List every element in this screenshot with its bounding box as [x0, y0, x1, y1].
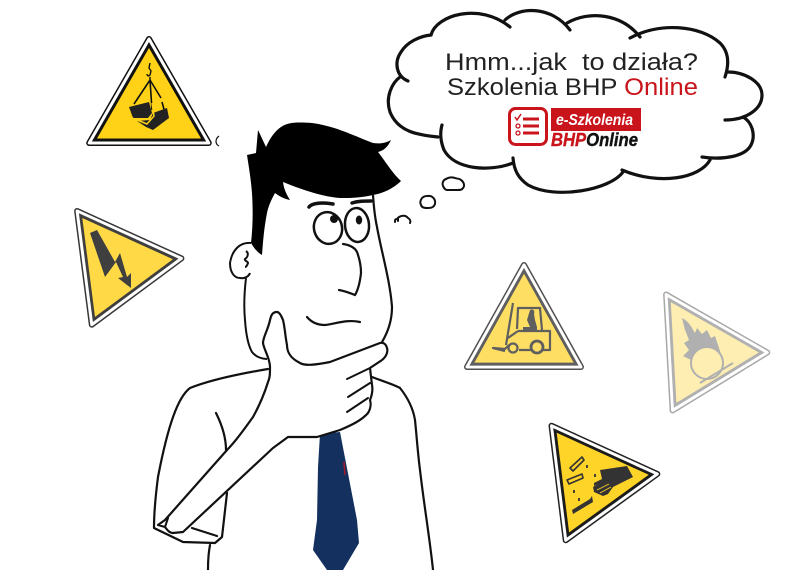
logo: e-Szkolenia BHPOnline	[510, 108, 641, 150]
thought cloud heading: Hmm...jak to działa?	[445, 49, 698, 76]
tie	[313, 432, 359, 570]
warning sign: oxidising material (faded)	[666, 294, 767, 410]
logo banner	[551, 108, 641, 131]
eyes	[310, 207, 370, 247]
small stray mark beside first sign	[216, 136, 219, 146]
warning sign: falling suspended load	[89, 39, 209, 143]
mouth	[307, 317, 360, 325]
thought cloud heading	[445, 49, 698, 101]
hand fingers	[165, 368, 370, 527]
ear	[230, 243, 251, 278]
thought cloud heading: Szkolenia BHP Online	[447, 74, 698, 101]
thought cloud	[388, 11, 762, 192]
face right line	[373, 195, 392, 342]
logo text: e-Szkolenia: e-Szkolenia	[556, 112, 633, 129]
shirt and arm	[154, 369, 433, 570]
person: thinking man	[154, 122, 433, 570]
warning sign: electric shock	[77, 211, 181, 325]
logo icon: checklist	[510, 108, 546, 144]
face left line	[244, 278, 267, 359]
warning sign: corrosive substance	[552, 426, 657, 540]
warning sign: forklift traffic	[467, 265, 581, 367]
pupils	[330, 215, 362, 224]
hand and forearm	[158, 312, 387, 533]
logo text: BHPOnline: BHPOnline	[551, 130, 638, 150]
hair	[247, 122, 401, 255]
face outline	[244, 190, 392, 363]
eyebrows	[309, 201, 371, 207]
tie highlight	[344, 462, 345, 475]
thought bubbles	[395, 177, 464, 223]
nose	[339, 244, 361, 295]
